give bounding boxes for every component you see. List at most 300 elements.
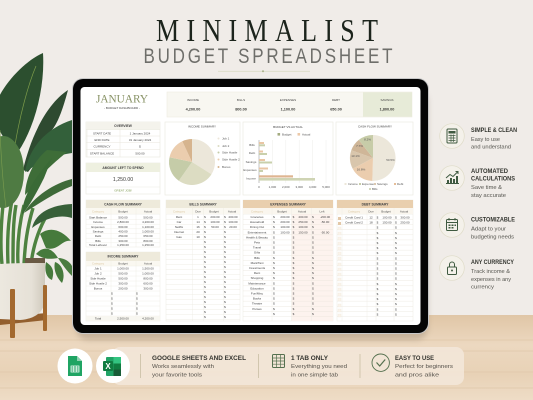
- panel: income summary pie chart: [165, 122, 240, 195]
- table: expenses summary: $: [293, 225, 295, 229]
- table: debt summary: 150.00: [382, 221, 392, 225]
- icon: calculator: [447, 129, 457, 143]
- table: expenses summary: $: [293, 286, 295, 290]
- table: bills summary: $: [224, 295, 226, 299]
- table: bills summary: $: [204, 295, 206, 299]
- table: debt summary: Due: [368, 210, 374, 214]
- table: expenses summary: $: [273, 225, 275, 229]
- table: bills summary: $: [224, 305, 226, 309]
- table: expenses summary: $: [273, 307, 275, 311]
- table: expenses summary: $: [273, 266, 275, 270]
- panel: income summary pie chart: Side Hustle: [222, 150, 238, 154]
- table: income summary: Side Hustle 2: [89, 282, 107, 286]
- table: debt summary: $: [377, 226, 379, 230]
- table: bills summary: $: [224, 215, 226, 219]
- table: bills summary: $: [204, 280, 206, 284]
- feature: automated calculations: [440, 166, 515, 199]
- table: income summary: 200.00: [118, 286, 128, 290]
- table: expenses summary: $: [312, 276, 314, 280]
- table: debt summary: $: [395, 256, 397, 260]
- feature: automated calculations: AUTOMATED: [471, 169, 509, 175]
- table: debt summary: 250.00: [400, 221, 410, 225]
- bottom feature bar: [58, 347, 464, 385]
- table: cash flow summary: 1,250.00: [142, 243, 154, 247]
- table: bills summary: BILLS SUMMARY: [189, 202, 217, 206]
- table: cash flow summary: 400.00: [118, 230, 128, 234]
- table: income summary: Job 1: [94, 266, 102, 270]
- table: expenses summary: Category: [251, 210, 264, 214]
- panel: overview: 1 January 2024: [130, 132, 151, 136]
- panel: overview: [86, 122, 160, 157]
- feature: customizable: CUSTOMIZABLE: [471, 218, 515, 224]
- table: debt summary: $: [377, 216, 379, 220]
- panel: income summary pie chart: Bonus: [222, 165, 231, 169]
- panel: cash flow summary pie chart: 7.7%: [356, 144, 363, 148]
- text: one tab only: in one simple tab: [291, 372, 338, 378]
- panel: amount left to spend: 1,250.00: [113, 177, 133, 183]
- table: debt summary: Credit Card 1: [345, 216, 363, 220]
- table: bills summary: 16: [196, 225, 200, 229]
- panel: budget vs actual bar chart: BUDGET VS ACTUAL: [273, 125, 303, 129]
- table: expenses summary: $: [312, 225, 314, 229]
- panel: cash flow summary pie chart: CASH FLOW SUMMARY: [358, 124, 392, 128]
- table: expenses summary: Travel: [253, 246, 261, 250]
- table: income summary: 1,500.00: [142, 266, 154, 270]
- table: bills summary: $: [204, 240, 206, 244]
- table: income summary: $: [111, 296, 113, 300]
- panel: budget vs actual bar chart: Savings: [246, 160, 257, 164]
- table: expenses summary: -50.00: [321, 220, 330, 224]
- table: income summary: Actual: [144, 262, 152, 266]
- table: bills summary: $: [204, 300, 206, 304]
- table: expenses summary: $: [312, 251, 314, 255]
- icon: check circle: [372, 354, 389, 371]
- feature: customizable: Adapt to your: [471, 226, 506, 232]
- table: expenses summary: $: [312, 297, 314, 301]
- table: debt summary: $: [395, 231, 397, 235]
- table: debt summary: $: [395, 241, 397, 245]
- table: expenses summary: $: [312, 312, 314, 316]
- table: expenses summary: $: [273, 215, 275, 219]
- table: expenses summary: $: [293, 230, 295, 234]
- table: cash flow summary: CASH FLOW SUMMARY: [104, 202, 143, 206]
- table: expenses summary: Mani/Tani: [251, 261, 264, 265]
- table: expenses summary: 150.00: [298, 230, 308, 234]
- table: bills summary: $: [204, 225, 206, 229]
- table: income summary: 1,000.00: [142, 272, 154, 276]
- table: cash flow summary: 250.00: [118, 234, 128, 238]
- panel: overview: START BALANCE: [90, 152, 114, 156]
- table: debt summary: $: [395, 266, 397, 270]
- table: bills summary: Budget: [209, 210, 219, 214]
- table: expenses summary: $: [293, 240, 295, 244]
- panel: budget vs actual bar chart: 4,000: [309, 185, 317, 189]
- table: income summary: Bonus: [94, 286, 103, 290]
- table: expenses summary: Education: [250, 286, 264, 290]
- table: bills summary: Internet: [174, 230, 184, 234]
- panel: cash flow summary pie chart: Income: [348, 182, 358, 186]
- table: cash flow summary: Savings: [93, 230, 104, 234]
- table: cash flow summary: 650.00: [143, 234, 153, 238]
- table: bills summary: Netflix: [175, 225, 184, 229]
- summary strip: 800.00: [235, 108, 247, 112]
- table: debt summary: $: [395, 251, 397, 255]
- table: cash flow summary: 2,800.00: [117, 220, 129, 224]
- table: cash flow summary: Start Balance: [89, 216, 107, 220]
- table: cash flow summary: [86, 200, 160, 247]
- table: expenses summary: $: [293, 266, 295, 270]
- text: easy to use: [395, 355, 453, 378]
- panel: budget vs actual bar chart: Expenses: [243, 168, 257, 172]
- title: [144, 14, 393, 72]
- panel: cash flow summary pie chart: 16.8%: [357, 168, 366, 172]
- table: bills summary: $: [224, 245, 226, 249]
- panel: amount left to spend: AMOUNT LEFT TO SPEND: [102, 166, 144, 170]
- feature: customizable: [440, 213, 515, 240]
- table: expenses summary: $: [273, 220, 275, 224]
- planter pot on wooden stand: [0, 258, 47, 338]
- icon: google sheets badge: [58, 348, 92, 384]
- table: debt summary: $: [377, 297, 379, 301]
- table: expenses summary: $: [293, 307, 295, 311]
- table: debt summary: $: [395, 216, 397, 220]
- table: cash flow summary: 1,000.00: [142, 230, 154, 234]
- table: bills summary: $: [204, 285, 206, 289]
- dashboard heading: JANUARY: [96, 91, 148, 105]
- table: expenses summary: $: [293, 251, 295, 255]
- table: expenses summary: $: [312, 240, 314, 244]
- table: income summary: Side Hustle: [90, 276, 106, 280]
- table: debt summary: $: [395, 297, 397, 301]
- table: cash flow summary: Budget: [118, 210, 128, 214]
- panel: budget vs actual bar chart: 0: [258, 185, 260, 189]
- table: bills summary: $: [224, 220, 226, 224]
- table: debt summary: $: [395, 287, 397, 291]
- table: expenses summary: $: [273, 240, 275, 244]
- table: cash flow summary: 500.00: [118, 216, 128, 220]
- table: expenses summary: $: [273, 312, 275, 316]
- panel: overview: $: [139, 144, 141, 148]
- table: bills summary: $: [204, 275, 206, 279]
- text: google sheets and excel: your favorite tools: [152, 372, 202, 378]
- table: bills summary: $: [224, 225, 226, 229]
- table: cash flow summary: 4,200.00: [142, 220, 154, 224]
- table: debt summary: Actual: [400, 210, 408, 214]
- panel: budget vs actual bar chart: Budget: [282, 132, 292, 136]
- table: income summary: 500.00: [118, 272, 128, 276]
- table: cash flow summary: 300.00: [118, 239, 128, 243]
- dashboard heading: - BUDGET DASHBOARD -: [104, 106, 140, 110]
- icon: table grid: [272, 354, 284, 368]
- table: bills summary: 200.00: [210, 215, 220, 219]
- table: debt summary: $: [377, 282, 379, 286]
- table: debt summary: Category: [348, 210, 361, 214]
- feature: automated calculations: Save time &: [471, 185, 502, 191]
- table: bills summary: $: [224, 270, 226, 274]
- feature: simple and clean: Easy to use: [471, 137, 500, 143]
- table: expenses summary: $: [293, 281, 295, 285]
- table: bills summary: $: [204, 305, 206, 309]
- table: expenses summary: $: [312, 235, 314, 239]
- table: expenses summary: $: [312, 307, 314, 311]
- table: expenses summary: Bills: [254, 256, 260, 260]
- table: expenses summary: $: [293, 271, 295, 275]
- table: bills summary: 10: [196, 235, 200, 239]
- table: bills summary: $: [204, 260, 206, 264]
- table: bills summary: $: [204, 255, 206, 259]
- panel: cash flow summary pie chart: Expenses: [362, 182, 376, 186]
- panel: cash flow summary pie chart: [336, 122, 413, 195]
- table: debt summary: [337, 200, 413, 321]
- table: income summary: 2,500.00: [117, 316, 129, 320]
- table: expenses summary: $: [273, 246, 275, 250]
- table: debt summary: 100.00: [382, 216, 392, 220]
- table: expenses summary: Budget: [277, 210, 287, 214]
- panel: budget vs actual bar chart: Bills: [249, 143, 255, 147]
- table: cash flow summary: Total Leftover: [89, 243, 107, 247]
- feature: automated calculations: CALCULATIONS: [471, 176, 515, 182]
- panel: cash flow summary pie chart: 8.2%: [364, 138, 371, 142]
- table: expenses summary: $: [312, 220, 314, 224]
- table: expenses summary: Left: [319, 210, 325, 214]
- table: debt summary: $: [377, 231, 379, 235]
- feature: any currency: Track income &: [471, 269, 510, 275]
- wooden table: [0, 315, 533, 400]
- feature: any currency: ANY CURRENCY: [471, 260, 514, 266]
- panel: budget vs actual bar chart: 2,000: [282, 185, 290, 189]
- table: debt summary: $: [395, 277, 397, 281]
- table: expenses summary: $: [273, 251, 275, 255]
- title: MINIMALIST: [156, 14, 378, 49]
- table: income summary: $: [136, 302, 138, 306]
- table: cash flow summary: 600.00: [118, 225, 128, 229]
- table: debt summary: 12: [369, 216, 373, 220]
- table: expenses summary: Rent: [254, 271, 260, 275]
- table: bills summary: 14: [196, 220, 200, 224]
- table: bills summary: $: [224, 290, 226, 294]
- table: expenses summary: $: [273, 230, 275, 234]
- table: bills summary: 400.00: [228, 215, 238, 219]
- table: expenses summary: -200.00: [320, 215, 330, 219]
- text: one tab only: Everything you need: [291, 364, 347, 370]
- table: income summary: Category: [92, 262, 105, 266]
- panel: budget vs actual bar chart: Income: [246, 176, 256, 180]
- table: bills summary: $: [224, 235, 226, 239]
- text: google sheets and excel: GOOGLE SHEETS AND EXCEL: [152, 355, 246, 362]
- table: debt summary: $: [377, 307, 379, 311]
- table: debt summary: $: [377, 277, 379, 281]
- feature: any currency: [440, 256, 514, 290]
- table: bills summary: 20.00: [229, 225, 237, 229]
- table: bills summary: $: [204, 250, 206, 254]
- table: expenses summary: $: [273, 276, 275, 280]
- panel: budget vs actual bar chart: 1,000: [269, 185, 276, 189]
- table: expenses summary: Groceries: [250, 215, 264, 219]
- table: income summary: INCOME SUMMARY: [107, 254, 139, 258]
- table: cash flow summary: 1,250.00: [117, 243, 129, 247]
- table: income summary: Total: [95, 316, 101, 320]
- table: bills summary: $: [224, 315, 226, 319]
- table: debt summary: 300.00: [400, 216, 410, 220]
- table: bills summary: $: [224, 260, 226, 264]
- table: debt summary: $: [395, 261, 397, 265]
- table: income summary: 300.00: [118, 282, 128, 286]
- table: bills summary: $: [204, 290, 206, 294]
- panel: income summary pie chart: Side Hustle 2: [222, 158, 240, 162]
- table: expenses summary: Gifts: [254, 251, 261, 255]
- table: bills summary: $: [204, 220, 206, 224]
- table: expenses summary: $: [312, 286, 314, 290]
- table: expenses summary: Actual: [298, 210, 306, 214]
- panel: cash flow summary pie chart: Debt: [397, 182, 404, 186]
- table: income summary: $: [111, 302, 113, 306]
- icon: rising chart: [446, 172, 459, 184]
- panel: overview: START DATE: [93, 132, 111, 136]
- feature: simple and clean: [440, 124, 517, 150]
- summary strip: DEBT: [332, 98, 340, 102]
- table: debt summary: $: [377, 261, 379, 265]
- panel: budget vs actual bar chart: Debt: [249, 151, 255, 155]
- table: bills summary: [166, 200, 240, 321]
- table: expenses summary: $: [273, 261, 275, 265]
- table: bills summary: $: [224, 300, 226, 304]
- table: expenses summary: [243, 200, 333, 321]
- text: google sheets and excel: Works seamlessly with: [152, 364, 214, 370]
- table: bills summary: Car: [177, 220, 181, 224]
- table: expenses summary: Investments: [249, 266, 266, 270]
- table: expenses summary: Fun/Misc: [251, 292, 264, 296]
- table: income summary: 1,000.00: [117, 266, 129, 270]
- table: bills summary: 20: [196, 230, 200, 234]
- table: debt summary: $: [377, 302, 379, 306]
- feature: any currency: currency: [471, 284, 494, 290]
- table: debt summary: 18: [369, 221, 373, 225]
- table: bills summary: 50.00: [211, 225, 219, 229]
- table: expenses summary: Theatre: [252, 302, 262, 306]
- table: bills summary: $: [224, 240, 226, 244]
- table: expenses summary: Shopping: [251, 276, 264, 280]
- summary strip: INCOME: [187, 98, 199, 102]
- summary strip: SAVINGS: [380, 98, 394, 102]
- table: bills summary: $: [204, 310, 206, 314]
- icon: excel badge: X: [105, 362, 111, 371]
- panel: budget vs actual bar chart: 3,000: [295, 185, 303, 189]
- table: expenses summary: $: [273, 292, 275, 296]
- table: bills summary: Category: [173, 210, 186, 214]
- feature: customizable: budgeting needs: [471, 234, 514, 240]
- table: income summary: $: [136, 292, 138, 296]
- table: bills summary: Rent: [176, 215, 182, 219]
- text: one tab only: [291, 355, 347, 378]
- table: debt summary: $: [395, 292, 397, 296]
- table: cash flow summary: 800.00: [143, 239, 153, 243]
- table: income summary: 500.00: [118, 276, 128, 280]
- table: expenses summary: 200.00: [280, 215, 290, 219]
- panel: overview: OVERVIEW: [114, 124, 133, 128]
- table: expenses summary: 400.00: [298, 215, 308, 219]
- panel: budget vs actual bar chart: Actual: [302, 132, 311, 136]
- table: expenses summary: Books: [253, 297, 262, 301]
- table: bills summary: $: [204, 270, 206, 274]
- table: debt summary: $: [395, 246, 397, 250]
- table: income summary: $: [136, 296, 138, 300]
- text: easy to use: and pros alike: [395, 372, 439, 378]
- table: bills summary: $: [204, 315, 206, 319]
- table: bills summary: $: [224, 250, 226, 254]
- table: expenses summary: $: [293, 292, 295, 296]
- table: debt summary: $: [395, 307, 397, 311]
- panel: overview: 500.00: [135, 152, 145, 156]
- panel: cash flow summary pie chart: Bills: [372, 187, 378, 191]
- table: expenses summary: Purses: [252, 307, 262, 311]
- table: expenses summary: Health & Beauty: [246, 235, 268, 239]
- table: income summary: 800.00: [143, 276, 153, 280]
- text: easy to use: EASY TO USE: [395, 355, 434, 362]
- table: income summary: 300.00: [143, 286, 153, 290]
- table: expenses summary: $: [312, 261, 314, 265]
- title: BUDGET SPREADSHEET: [144, 45, 393, 68]
- table: debt summary: $: [395, 302, 397, 306]
- table: expenses summary: -50.00: [321, 230, 330, 234]
- table: bills summary: $: [224, 275, 226, 279]
- table: expenses summary: Household: [250, 220, 265, 224]
- table: expenses summary: 200.00: [280, 220, 290, 224]
- feature: any currency: expenses in any: [471, 277, 511, 283]
- table: expenses summary: $: [273, 235, 275, 239]
- table: expenses summary: $: [312, 230, 314, 234]
- summary strip: 4,200.00: [186, 108, 200, 112]
- table: bills summary: $: [204, 245, 206, 249]
- table: debt summary: $: [395, 312, 397, 316]
- table: cash flow summary: Debt: [95, 234, 101, 238]
- table: expenses summary: $: [273, 281, 275, 285]
- table: expenses summary: $: [293, 312, 295, 316]
- panel: overview: 31 January 2024: [129, 138, 152, 142]
- table: expenses summary: $: [293, 261, 295, 265]
- table: debt summary: $: [377, 292, 379, 296]
- table: cash flow summary: Expenses: [91, 225, 105, 229]
- table: bills summary: $: [224, 280, 226, 284]
- text: google sheets and excel: [152, 355, 246, 378]
- table: debt summary: $: [377, 312, 379, 316]
- table: expenses summary: 250.00: [298, 220, 308, 224]
- table: bills summary: $: [204, 230, 206, 234]
- table: income summary: $: [111, 312, 113, 316]
- panel: income summary pie chart: INCOME SUMMARY: [188, 124, 216, 128]
- icon: calendar: [446, 218, 458, 230]
- table: bills summary: $: [204, 235, 206, 239]
- table: bills summary: $: [224, 255, 226, 259]
- table: income summary: $: [136, 312, 138, 316]
- icon: excel badge: [96, 349, 130, 383]
- table: debt summary: Budget: [381, 210, 391, 214]
- table: cash flow summary: Bills: [95, 239, 101, 243]
- table: bills summary: 100.00: [228, 220, 238, 224]
- table: expenses summary: Entertainment: [248, 230, 266, 234]
- table: expenses summary: $: [293, 246, 295, 250]
- table: expenses summary: Maintenance: [248, 281, 266, 285]
- icon: padlock: [448, 262, 456, 274]
- table: expenses summary: $: [273, 297, 275, 301]
- table: income summary: 4,200.00: [142, 316, 154, 320]
- table: bills summary: $: [224, 265, 226, 269]
- table: debt summary: $: [395, 226, 397, 230]
- table: expenses summary: $: [293, 215, 295, 219]
- summary strip: 1,100.00: [281, 108, 295, 112]
- table: expenses summary: $: [293, 302, 295, 306]
- text: easy to use: Perfect for beginners: [395, 364, 453, 370]
- table: expenses summary: $: [273, 271, 275, 275]
